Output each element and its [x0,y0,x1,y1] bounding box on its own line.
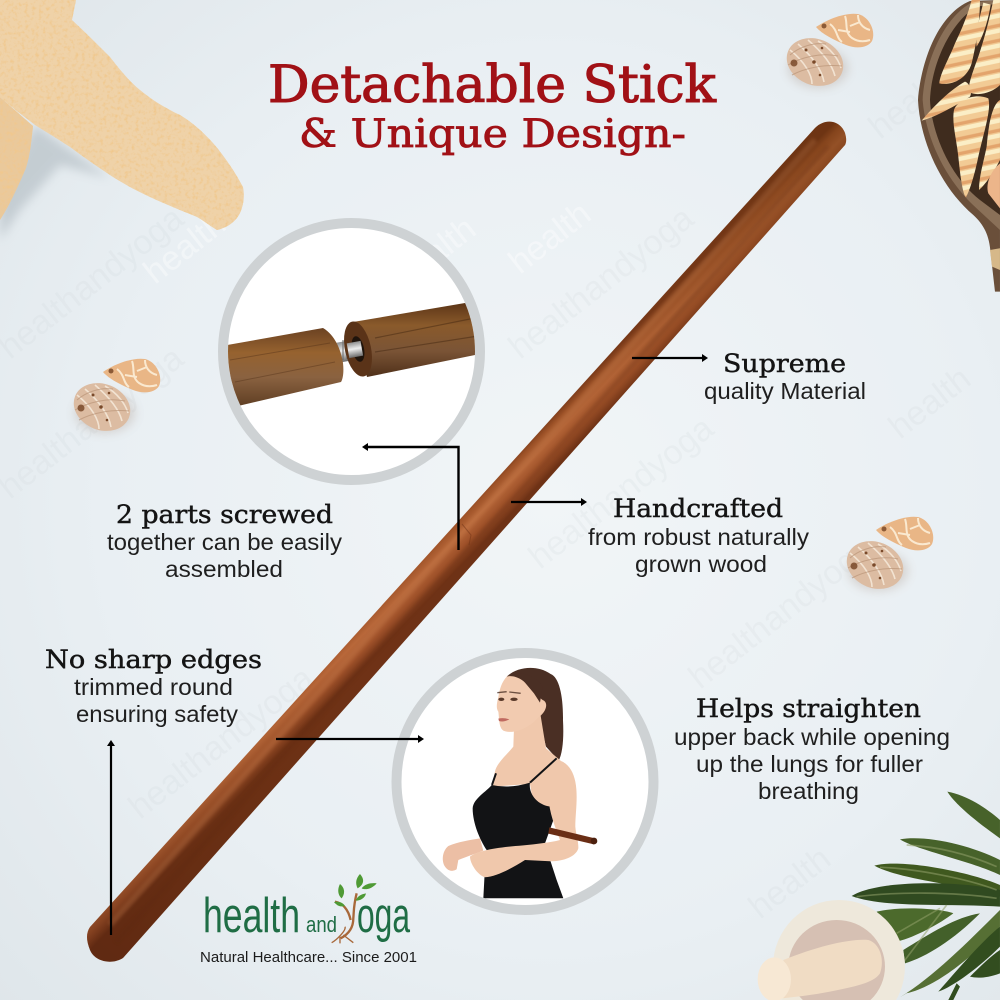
watermark pattern: healthandyoga [522,409,721,576]
callout: no sharp edges: trimmed round [74,674,233,700]
stick behind back [548,827,595,844]
arrow: quality material [632,354,708,362]
callout: helps straighten: Helps straighten [696,694,921,723]
logo: health and yoga: and [306,912,337,937]
callout: supreme: Supreme [723,349,846,378]
watermark pattern: healthandyoga [122,659,321,826]
circle: woman demonstrating stick [396,653,654,910]
icon: tree [332,874,377,943]
callout: 2 parts screwed: 2 parts screwed [116,500,333,529]
callout: no sharp edges [45,645,262,727]
watermark pattern: health [882,359,978,446]
black top [473,783,563,898]
right rod [353,303,480,377]
logo: health and yoga: oga [357,889,410,943]
watermark pattern: health [502,194,598,281]
callout: helps straighten [674,694,950,804]
arrow: woman circle [276,735,424,743]
callout: supreme: quality Material [704,378,866,404]
title: & Unique Design- [299,112,686,157]
palm leaves [852,792,1000,1000]
face [497,675,546,732]
watermark pattern: health [862,59,958,146]
decorative shell pairs [66,14,933,597]
title [268,56,717,157]
callout: no sharp edges: ensuring safety [76,701,239,727]
callout: helps straighten: breathing [758,778,859,804]
callout: no sharp edges: No sharp edges [45,645,262,674]
screw [336,340,348,362]
callout: handcrafted: from robust naturally [588,524,810,550]
shell bowl [918,0,1000,292]
callout: 2 parts screwed: together can be easily [107,529,343,555]
watermark pattern: health [137,204,233,291]
loofah sponge [0,0,244,240]
watermark pattern: healthandyoga [682,529,881,696]
logo: health and yoga [200,874,417,966]
arrow: no sharp edges [107,740,115,935]
near arm and hand [470,761,578,877]
callout: helps straighten: up the lungs for fuller [696,751,923,777]
watermark pattern: healthandyoga [502,199,701,366]
arrow: handcrafted [511,498,587,506]
neck, shoulders and chest [492,712,561,808]
stick [87,122,846,962]
callout: 2 parts screwed: assembled [165,556,283,582]
mortar and pestle [758,900,905,1000]
circle: screw joint close-up [222,223,480,480]
title: Detachable Stick [268,56,717,115]
watermark pattern: health [387,209,483,296]
back arm and hand [443,838,483,871]
ponytail and hair [507,668,563,761]
left rod [228,328,344,406]
callout: handcrafted: grown wood [635,551,767,577]
callout: supreme [704,349,866,404]
callout: helps straighten: upper back while opening [674,724,950,750]
logo: health and yoga: health [203,889,300,943]
callout: handcrafted [588,494,810,577]
logo: health and yoga: Natural Healthcare... Since 2001 [200,950,417,966]
callout: 2 parts screwed [107,500,343,582]
arrow: screw joint [362,443,458,550]
callout: handcrafted: Handcrafted [613,494,783,523]
watermark pattern: health [742,839,838,926]
